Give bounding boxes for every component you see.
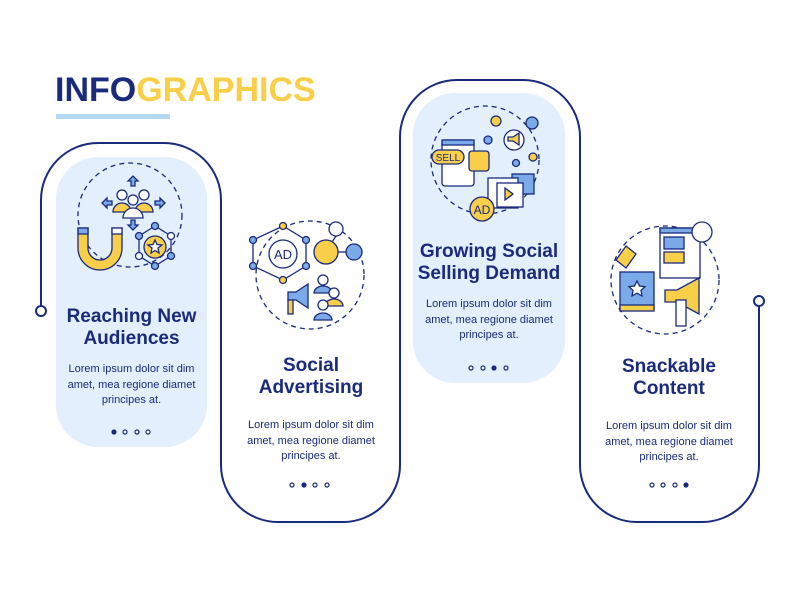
title underline	[56, 114, 170, 119]
heading col4	[622, 356, 716, 399]
heading col2: Advertising	[259, 377, 363, 398]
dots col4	[650, 483, 688, 487]
body col4: Lorem ipsum dolor sit dim amet, mea regione diamet principes at.	[605, 420, 733, 463]
text: col4	[605, 356, 733, 463]
icon: snackable content	[611, 222, 719, 334]
heading col4: Content	[633, 378, 705, 399]
title: INFOGRAPHICS	[55, 71, 316, 109]
heading col1: Reaching New Audiences	[67, 306, 196, 349]
connector path	[41, 80, 759, 522]
icon: reaching new audiences	[78, 163, 182, 270]
icon: social advertising: AD	[274, 247, 292, 262]
text: col2	[247, 355, 375, 462]
icon: growing social selling demand	[431, 106, 539, 221]
body col2: Lorem ipsum dolor sit dim amet, mea regione diamet principes at.	[247, 419, 375, 462]
icon: social advertising	[250, 221, 364, 329]
icon: growing social selling demand: SELL	[436, 153, 461, 164]
heading col2	[259, 355, 363, 398]
panel background: col1	[56, 157, 207, 447]
body col3: Lorem ipsum dolor sit dim amet, mea regione diamet principes at.	[425, 298, 553, 341]
heading col2: Social	[283, 355, 339, 376]
body col1: Lorem ipsum dolor sit dim amet, mea regione diamet principes at.	[68, 363, 195, 406]
text: col1	[67, 306, 196, 406]
dots col2	[290, 483, 329, 487]
dots col1	[112, 430, 150, 434]
icon: growing social selling demand: AD	[474, 203, 491, 217]
connector dot right	[754, 296, 764, 306]
heading col4: Snackable	[622, 356, 716, 377]
heading col3: Growing Social Selling Demand	[418, 241, 560, 284]
text: col3	[418, 241, 560, 341]
dots col3	[469, 366, 508, 370]
connector dot left	[36, 306, 46, 316]
panel background: col3	[413, 93, 565, 383]
